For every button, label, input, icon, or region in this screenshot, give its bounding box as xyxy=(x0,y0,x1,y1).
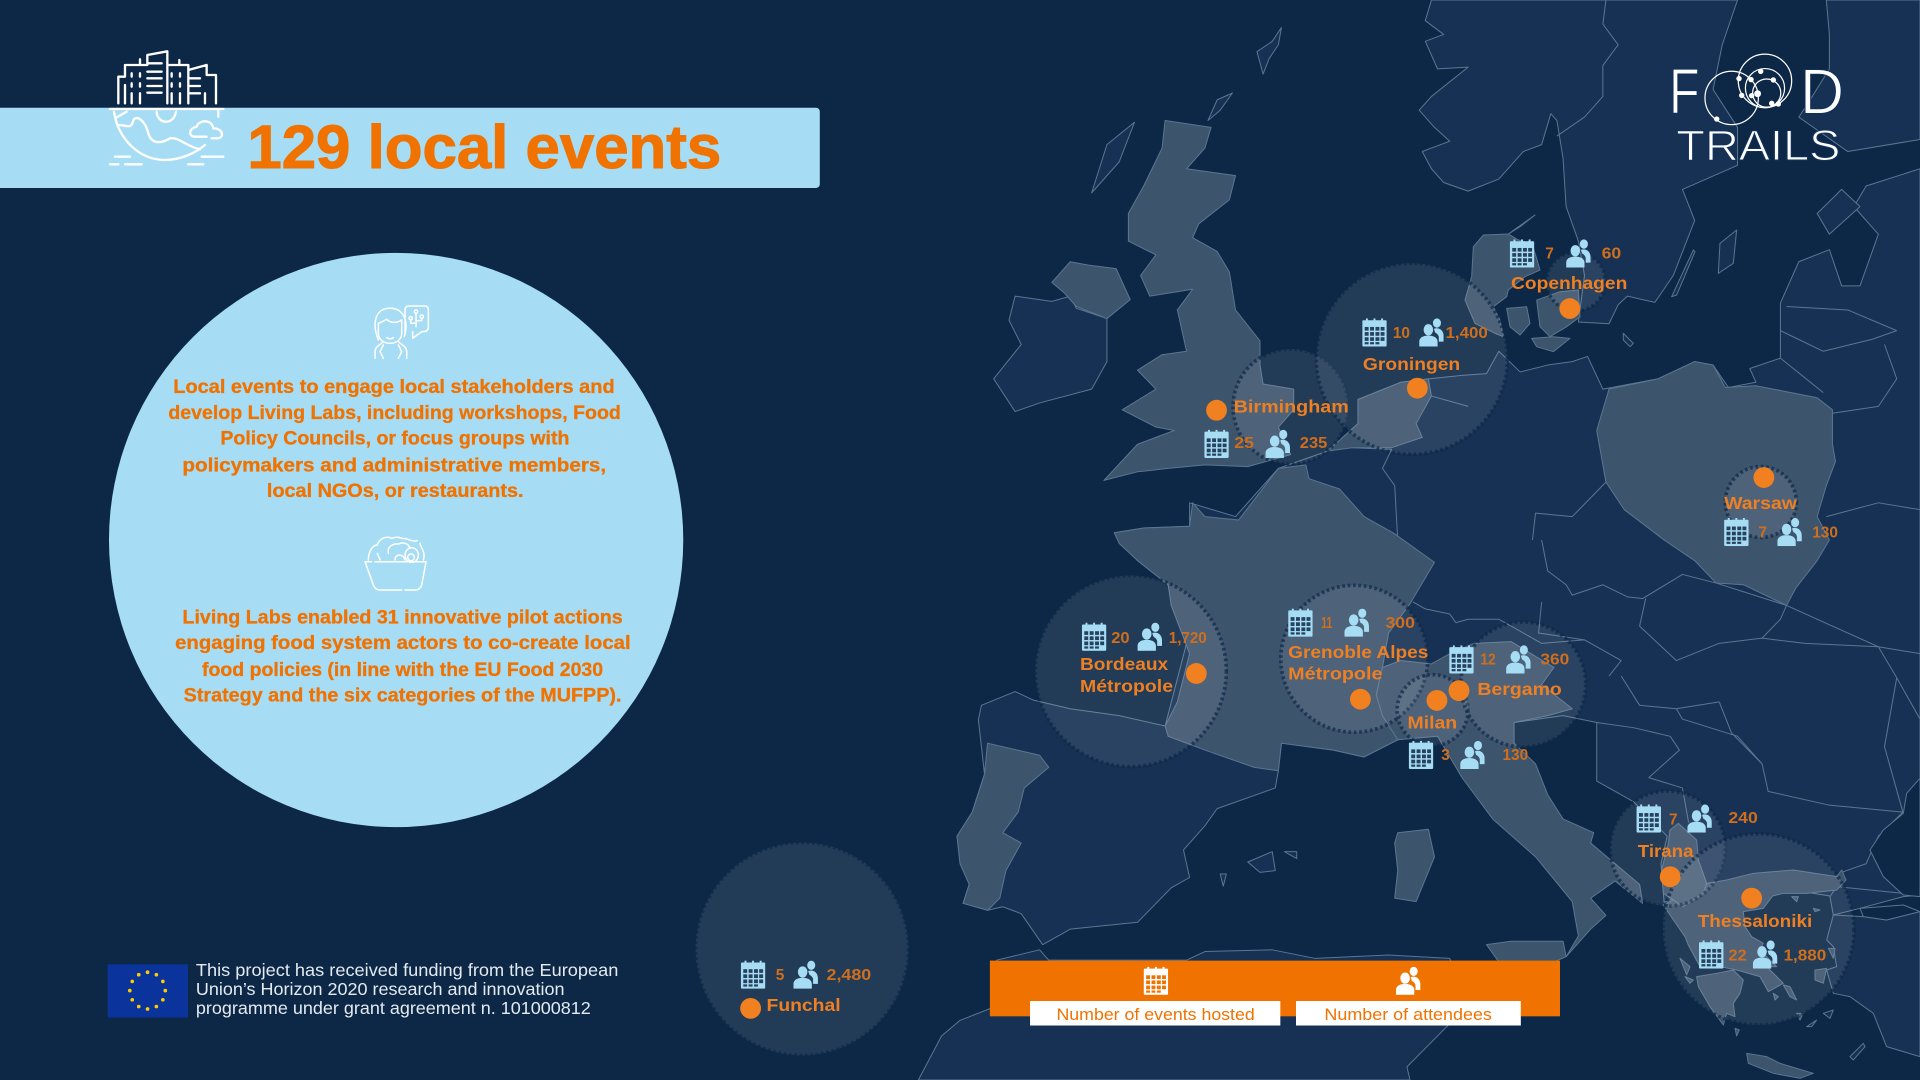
city: Tirana: 7 xyxy=(1669,812,1678,829)
city: Milan: 130 xyxy=(1502,747,1528,764)
city: Thessaloniki: 1,880 xyxy=(1783,948,1826,965)
Greek islands xyxy=(1680,897,1865,1060)
text: funding statement: Union’s Horizon 2020 research and innovation xyxy=(196,979,564,999)
text: living labs description: engaging food system actors to co-create local xyxy=(175,632,631,654)
city: Funchal: Funchal xyxy=(767,995,841,1015)
icon: food bowl xyxy=(365,537,426,590)
land: Thrace xyxy=(1830,887,1920,915)
text: funding statement: programme under grant agreement n. 101000812 xyxy=(196,998,591,1018)
city: Thessaloniki: 22 xyxy=(1728,948,1747,965)
logo: Food Trails: TRAILS xyxy=(1676,122,1840,170)
text: local events description: develop Living Labs, including workshops, Food xyxy=(168,402,621,424)
text: funding statement: This project has received funding from the European xyxy=(196,960,618,980)
highlighted: France xyxy=(1114,465,1434,771)
city: Warsaw xyxy=(1724,467,1838,546)
city: Thessaloniki: Thessaloniki xyxy=(1698,911,1812,931)
text: living labs description xyxy=(175,606,631,707)
highlighted: Netherlands xyxy=(1327,379,1431,451)
legend item: events hosted xyxy=(1030,967,1280,1026)
highlighted: Albania xyxy=(1662,823,1707,907)
logo: Food Trails: F xyxy=(1669,56,1700,127)
highlighted: United Kingdom xyxy=(1104,121,1294,480)
island: Gotland xyxy=(1718,230,1737,273)
highlighted: Greek mainland xyxy=(1663,870,1846,992)
city: Grenoble Alpes Métropole: Grenoble Alpes xyxy=(1288,642,1428,662)
highlighted: Crete xyxy=(1747,1053,1813,1078)
land: North Africa xyxy=(918,950,1468,1080)
icon: EU flag xyxy=(108,964,188,1018)
highlighted: Sicily xyxy=(1487,941,1566,962)
legend item: attendees xyxy=(1296,967,1521,1026)
city: Bordeaux Métropole: 1,720 xyxy=(1169,630,1207,647)
text: living labs description: food policies (in line with the EU Food 2030 xyxy=(202,659,603,681)
highlighted: Poland xyxy=(1597,362,1836,605)
city: Tirana xyxy=(1637,804,1758,887)
city: Milan xyxy=(1408,690,1528,769)
city: Grenoble Alpes Métropole: 300 xyxy=(1386,615,1415,632)
city: Warsaw: 7 xyxy=(1758,525,1767,542)
highlighted: Italy xyxy=(1376,642,1643,957)
city: Groningen xyxy=(1362,318,1488,399)
text: funding statement xyxy=(196,960,618,1018)
EU funding notice xyxy=(108,960,618,1018)
map detail: Balkans and Aegean xyxy=(1662,778,1920,1078)
city: Bergamo: Bergamo xyxy=(1477,679,1562,699)
city: Birmingham: 25 xyxy=(1234,435,1254,452)
Balearic islands xyxy=(1220,852,1297,886)
legend item: events hosted: Number of events hosted xyxy=(1056,1005,1255,1024)
city: Milan: 3 xyxy=(1441,747,1450,764)
sea: Black Sea xyxy=(1870,778,1920,897)
city: Grenoble Alpes Métropole: 11 xyxy=(1321,615,1332,632)
land: Finland xyxy=(1799,0,1920,152)
city: Grenoble Alpes Métropole: Métropole xyxy=(1288,664,1383,684)
highlighted southern countries xyxy=(957,465,1643,962)
city: Bordeaux Métropole: Bordeaux xyxy=(1080,654,1168,674)
city: Milan: Milan xyxy=(1408,713,1457,733)
city: Birmingham: Birmingham xyxy=(1234,397,1349,417)
logo: Food Trails: D xyxy=(1800,56,1844,127)
highlighted: Northern Ireland xyxy=(1052,262,1130,319)
city: Warsaw: 130 xyxy=(1812,525,1838,542)
city: Groningen: Groningen xyxy=(1363,354,1460,374)
highlighted: Sardinia and Corsica xyxy=(1395,829,1434,902)
city: Copenhagen: 60 xyxy=(1602,245,1621,262)
city: Copenhagen xyxy=(1510,239,1627,319)
city: Tirana: Tirana xyxy=(1638,841,1694,861)
icon: city on globe xyxy=(110,51,223,164)
title banner xyxy=(0,108,820,188)
icon: person with idea bubble xyxy=(375,306,428,358)
map of Europe xyxy=(918,0,1920,1080)
land: Ireland xyxy=(994,296,1107,412)
text: local events description xyxy=(168,376,621,502)
banner bar xyxy=(0,108,820,188)
city: Grenoble Alpes Métropole xyxy=(1288,609,1428,710)
logo: Food Trails xyxy=(1669,54,1844,170)
island: Bornholm xyxy=(1623,333,1633,347)
city: Copenhagen: Copenhagen xyxy=(1511,273,1627,293)
city: Bergamo xyxy=(1449,645,1569,701)
city: Birmingham: 235 xyxy=(1300,435,1327,452)
text: local events description: Local events to engage local stakeholders and xyxy=(173,376,615,398)
city: Funchal: 5 xyxy=(776,967,784,984)
city: Funchal: 2,480 xyxy=(827,967,871,984)
island: Oland xyxy=(1672,250,1695,297)
title: 129 local events xyxy=(247,113,721,181)
city: Copenhagen: 7 xyxy=(1545,245,1554,262)
land: continental Europe xyxy=(957,169,1920,945)
text: living labs description: Strategy and the six categories of the MUFPP). xyxy=(184,685,621,707)
city: Thessaloniki xyxy=(1698,888,1826,969)
text: living labs description: Living Labs enabled 31 innovative pilot actions xyxy=(182,606,623,628)
city: Tirana: 240 xyxy=(1728,810,1758,827)
legend xyxy=(990,961,1560,1026)
highlighted: Peloponnese xyxy=(1697,970,1743,1025)
land: Norway and Sweden xyxy=(1419,0,1738,324)
text: local events description: Policy Councils, or focus groups with xyxy=(220,427,569,449)
sea: Marmara xyxy=(1860,905,1920,920)
city: Groningen: 10 xyxy=(1393,325,1410,342)
Scottish islands xyxy=(1092,28,1281,193)
city: Birmingham xyxy=(1204,397,1349,458)
highlighted: Denmark xyxy=(1465,215,1580,352)
map detail: Denmark and southern Baltic xyxy=(1465,215,1737,352)
city: Bordeaux Métropole: 20 xyxy=(1111,630,1130,647)
Baltic islands xyxy=(1817,189,1860,234)
internal borders xyxy=(1352,0,1920,540)
legend item: attendees: Number of attendees xyxy=(1324,1005,1492,1024)
city: Funchal xyxy=(740,961,871,1019)
city circles xyxy=(696,252,1854,1056)
city: Bergamo: 12 xyxy=(1480,651,1496,668)
land: Turkey xyxy=(1827,912,1920,1057)
city: Groningen: 1,400 xyxy=(1446,325,1488,342)
panel: description circle xyxy=(109,253,683,827)
city: Bordeaux Métropole xyxy=(1080,623,1207,696)
text: local events description: policymakers and administrative members, xyxy=(182,454,606,476)
city: Bergamo: 360 xyxy=(1540,651,1569,668)
city: Warsaw: Warsaw xyxy=(1724,493,1797,513)
city: Bordeaux Métropole: Métropole xyxy=(1080,676,1173,696)
highlighted: Portugal xyxy=(957,743,1049,910)
text: local events description: local NGOs, or restaurants. xyxy=(267,480,523,502)
